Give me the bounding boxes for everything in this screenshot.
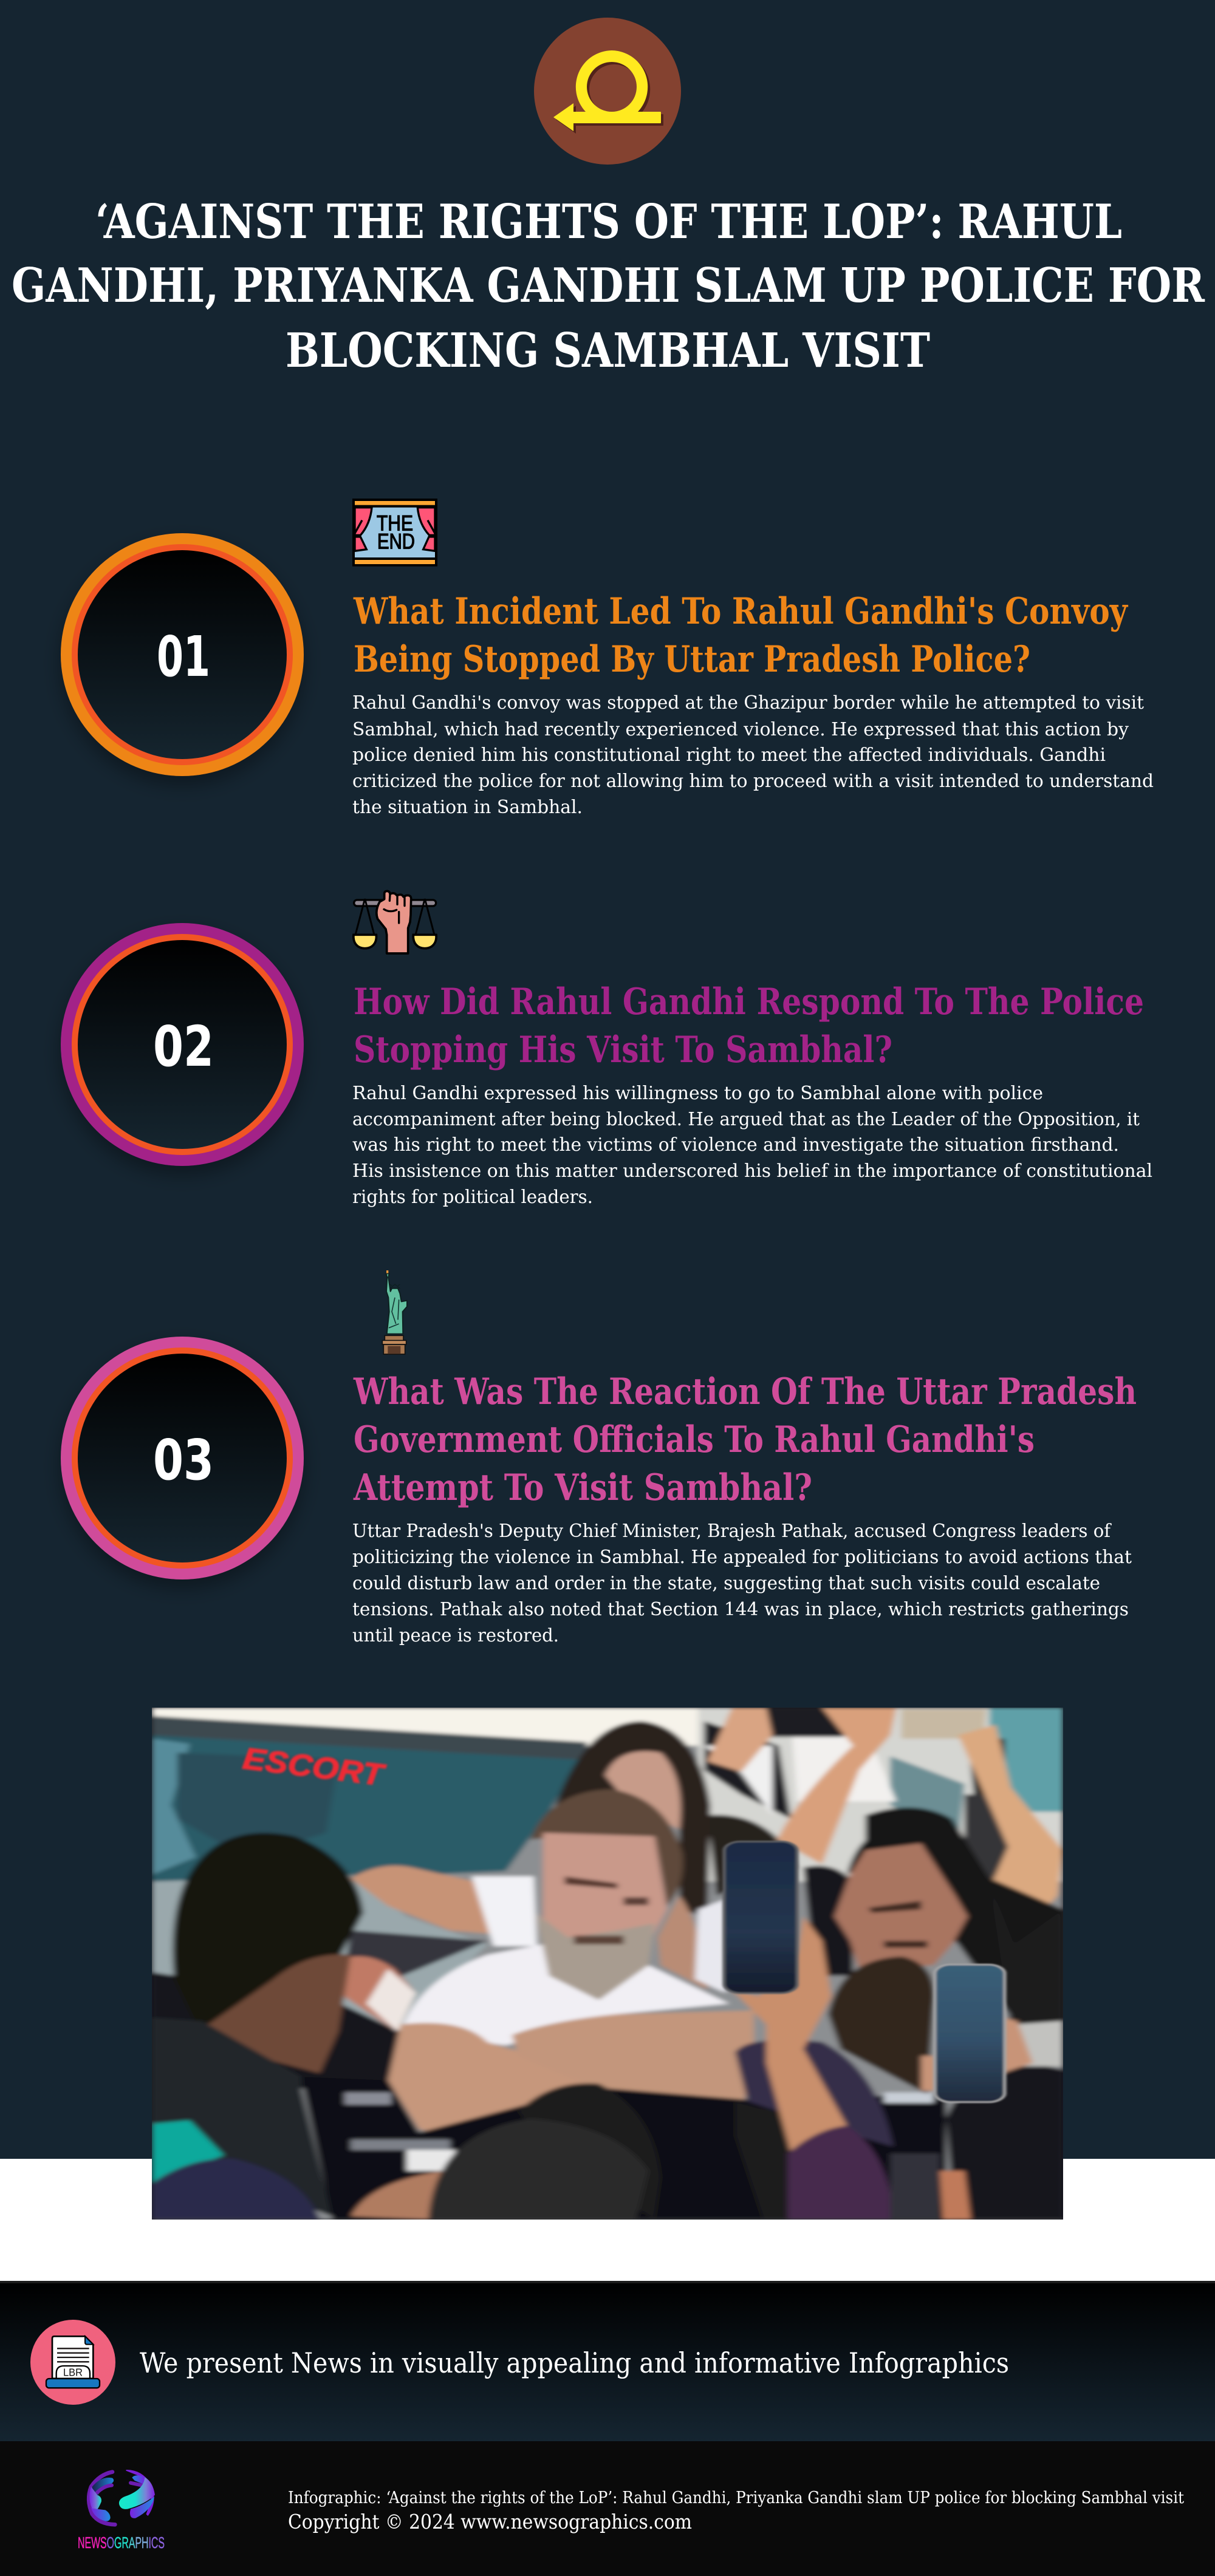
right-lower head	[946, 2065, 1063, 2220]
icon: document badge	[30, 2320, 115, 2405]
tagline text: We present News in visually appealing and informative Infographics	[140, 2346, 1009, 2379]
heading 03: Attempt To Visit Sambhal?	[353, 1467, 812, 1509]
woman behind	[555, 1721, 710, 1917]
body text 02: His insistence on this matter underscored his belief in the importance of constitutional	[352, 1160, 1152, 1182]
logo: newsographics	[78, 2470, 165, 2552]
number badge 02: 02	[153, 1014, 214, 1079]
body text 01: police denied him his constitutional right to meet the affected individuals. Gandhi	[352, 745, 1106, 766]
heading 03	[353, 1371, 1137, 1509]
heading 03: Government Officials To Rahul Gandhi's	[354, 1419, 1035, 1461]
panel: item 01	[61, 499, 1154, 818]
icon: loop arrow badge	[534, 18, 681, 165]
icon: statue of liberty	[382, 1270, 407, 1354]
right man	[843, 1840, 872, 1876]
body text 03: politicizing the violence in Sambhal. He appealed for politicians to avoid actions that	[352, 1547, 1132, 1568]
phone one	[724, 1841, 797, 1993]
heading 01	[353, 590, 1129, 681]
number badge 03	[61, 1337, 304, 1579]
body text 03	[352, 1521, 1132, 1646]
curly head	[828, 1957, 934, 2094]
heading 02: Stopping His Visit To Sambhal?	[354, 1029, 892, 1071]
copyright: Copyright © 2024 www.newsographics.com	[288, 2510, 692, 2533]
footer	[0, 2441, 1215, 2576]
body text 01: Rahul Gandhi's convoy was stopped at the Ghazipur border while he attempted to visit	[352, 692, 1144, 714]
body text 03: Uttar Pradesh's Deputy Chief Minister, Brajesh Pathak, accused Congress leaders of	[352, 1521, 1112, 1542]
title: BLOCKING SAMBHAL VISIT	[286, 323, 930, 378]
painted scene	[152, 1708, 1063, 2220]
beard	[536, 1913, 655, 2000]
body text 03: until peace is restored.	[352, 1625, 559, 1646]
body text 03: tensions. Pathak also noted that Section 144 was in place, which restricts gatherings	[352, 1599, 1129, 1620]
band: tagline strip	[0, 2281, 1215, 2441]
phones	[724, 1841, 1005, 2102]
ESCORT lettering on windscreen: ESCORT	[241, 1741, 388, 1793]
title	[12, 194, 1205, 378]
body text 01: criticized the police for not allowing him to proceed with a visit intended to understand	[352, 771, 1154, 792]
heading 02	[354, 981, 1144, 1071]
photo: Rahul Gandhi among crowd at car	[152, 1708, 1063, 2220]
icon: document badge: LBR	[63, 2366, 83, 2379]
body text 02: Rahul Gandhi expressed his willingness to go to Sambhal alone with police	[352, 1083, 1043, 1104]
number badge 01: 01	[157, 624, 210, 689]
body text 02: was his right to meet the victims of violence and investigate the situation firsthand.	[352, 1134, 1119, 1156]
body text 02: rights for political leaders.	[352, 1187, 593, 1208]
number badge 01	[61, 533, 304, 776]
body text 02: accompaniment after being blocked. He argued that as the Leader of the Opposition, it	[352, 1109, 1140, 1130]
panel: item 02	[61, 891, 1152, 1208]
car frame	[301, 2077, 946, 2220]
body text 01	[352, 692, 1154, 818]
body text 03: could disturb law and order in the state, suggesting that such visits could escalate	[352, 1573, 1100, 1594]
Rahul hair	[530, 1789, 683, 1906]
body text 01: the situation in Sambhal.	[352, 797, 583, 818]
Rahul face	[543, 1833, 667, 1944]
number badge 03: 03	[153, 1428, 214, 1493]
logo: newsographics: NEWSOGRAPHICS	[78, 2533, 165, 2552]
panel: item 03	[61, 1270, 1137, 1646]
body text 02	[352, 1083, 1152, 1208]
Rahul shirt	[400, 1944, 729, 2045]
heading 01: Being Stopped By Uttar Pradesh Police?	[354, 638, 1030, 681]
number badge 02	[61, 923, 304, 1166]
left sleeve	[344, 1956, 416, 2031]
icon: the end curtain: THE	[377, 511, 413, 535]
icon: fist holding scales	[354, 891, 436, 953]
icon: the end curtain: END	[377, 530, 415, 553]
arms	[388, 2023, 599, 2136]
dark capped person and raised hand	[735, 2040, 893, 2147]
phone two	[935, 1964, 1005, 2102]
icon: the end curtain	[352, 499, 437, 567]
bottom heads	[518, 2084, 661, 2220]
left man	[173, 1833, 363, 2025]
arm and sleeve left of centre	[351, 1866, 493, 1934]
body text 01: Sambhal, which had recently experienced violence. He expressed that this action by	[352, 719, 1129, 740]
